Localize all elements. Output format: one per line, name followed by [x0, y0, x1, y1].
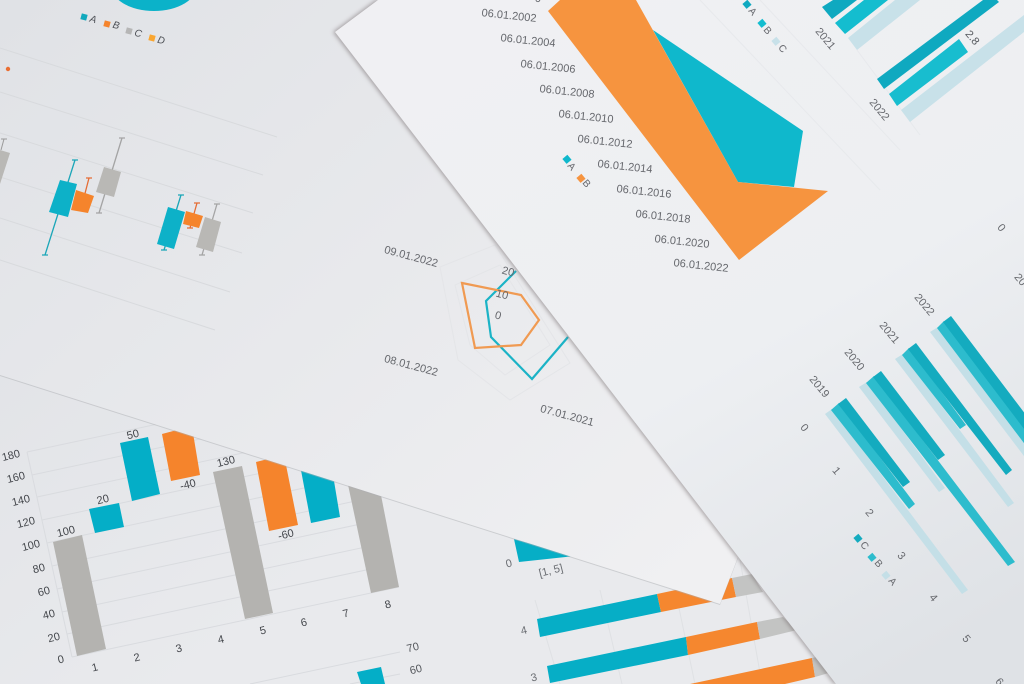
area chart: 06.01.2018 [635, 208, 691, 226]
legend A B: A [565, 161, 578, 173]
lower cropped bar chart: 70 [406, 641, 420, 655]
stacked horizontal bars [505, 539, 832, 684]
waterfall chart: 40 [42, 608, 56, 622]
sheet: box plot and radar chart [0, 0, 738, 605]
waterfall chart: 20 [47, 631, 61, 645]
radar chart: 08.01.2022 [383, 353, 439, 379]
waterfall chart: 8 [384, 598, 392, 612]
lower right grouped bar chart: 3 [894, 550, 908, 562]
lower right grouped bar chart: 2019 [807, 374, 831, 400]
waterfall chart: 3 [175, 642, 183, 656]
legend A B C D: A [87, 14, 98, 26]
legend A B C: A [746, 6, 759, 18]
area chart: 06.01.2010 [558, 108, 614, 126]
radar chart: 20 [501, 265, 515, 279]
lower right grouped bar chart: 2021 [877, 320, 901, 346]
legend C B A [853, 534, 899, 588]
legend C B A: B [872, 558, 885, 570]
legend A B C [742, 0, 789, 55]
radar chart [383, 244, 595, 429]
radar chart: 09.01.2022 [383, 244, 439, 270]
top right bar chart: 2021 [813, 26, 837, 52]
area chart: 06.01.2004 [500, 32, 556, 50]
legend A B C: B [761, 25, 774, 37]
lower right grouped bar chart: 2022 [912, 292, 936, 318]
lower right grouped bar chart [797, 292, 1024, 684]
area chart: 06.01.2014 [597, 158, 653, 176]
stacked horizontal bars: 0 [505, 557, 513, 571]
area chart: 06.01.2020 [654, 233, 710, 251]
waterfall chart: 130 [216, 454, 236, 470]
lower cropped bar chart [250, 641, 423, 684]
radar chart: 0 [493, 309, 503, 323]
area chart [481, 0, 900, 275]
legend A B: B [580, 178, 593, 190]
waterfall chart: 50 [126, 428, 140, 442]
waterfall chart [1, 382, 399, 675]
radar chart: 07.01.2021 [539, 403, 595, 429]
waterfall chart: 0 [57, 653, 65, 667]
legend A B C D: D [156, 35, 166, 47]
legend A B C: C [775, 43, 789, 55]
lower cropped bar chart: 60 [409, 663, 423, 677]
sheet: area chart and bar charts [333, 0, 1024, 684]
legend A B [562, 155, 593, 190]
legend A B C D [80, 13, 166, 47]
waterfall chart: -60 [277, 527, 295, 543]
waterfall chart: 1 [91, 661, 99, 675]
waterfall chart: 100 [56, 524, 76, 540]
waterfall chart: 160 [6, 470, 26, 486]
area chart: 06.01.2012 [577, 133, 633, 151]
lower right grouped bar chart: 0 [797, 422, 811, 434]
top right bar chart: 0 [994, 222, 1008, 234]
waterfall chart: 100 [21, 538, 41, 554]
lower right grouped bar chart: 1 [829, 465, 843, 477]
stacked horizontal bars: 4 [520, 624, 528, 638]
waterfall chart: 2 [133, 651, 141, 665]
waterfall chart: 5 [259, 624, 267, 638]
lower right grouped bar chart: 2020 [842, 347, 866, 373]
lower right grouped bar chart: 4 [926, 592, 940, 604]
area chart: 06.01.2002 [481, 7, 537, 25]
lower right grouped bar chart: 5 [959, 633, 973, 645]
area chart: 06.01.2006 [520, 58, 576, 76]
waterfall chart: 20 [96, 493, 110, 507]
lower right grouped bar chart: 2 [862, 507, 876, 519]
stacked horizontal bars: [1, 5] [538, 562, 564, 580]
waterfall chart: 80 [32, 562, 46, 576]
top right bar chart: 2022 [867, 97, 891, 123]
waterfall chart: 7 [342, 607, 350, 621]
waterfall chart: 6 [300, 616, 308, 630]
area chart: 06.01.2022 [673, 257, 729, 275]
top right bar chart: 2.8 [962, 28, 982, 48]
top right bar chart [742, 0, 1024, 289]
radar chart: 10 [495, 288, 509, 302]
legend A B C D: B [111, 20, 121, 32]
legend C B A: A [886, 576, 899, 588]
waterfall chart: 120 [16, 515, 36, 531]
waterfall chart: 180 [1, 448, 21, 464]
area chart: 06.01.2016 [616, 183, 672, 201]
waterfall chart: 140 [11, 493, 31, 509]
waterfall chart: -40 [179, 477, 197, 493]
waterfall chart: 4 [217, 633, 225, 647]
box plot [0, 48, 277, 330]
waterfall chart: 60 [37, 585, 51, 599]
legend A B C D: C [133, 28, 144, 40]
legend C B A: C [857, 540, 871, 552]
donut fragment [110, 0, 198, 11]
area chart: 06.01.2008 [539, 83, 595, 101]
